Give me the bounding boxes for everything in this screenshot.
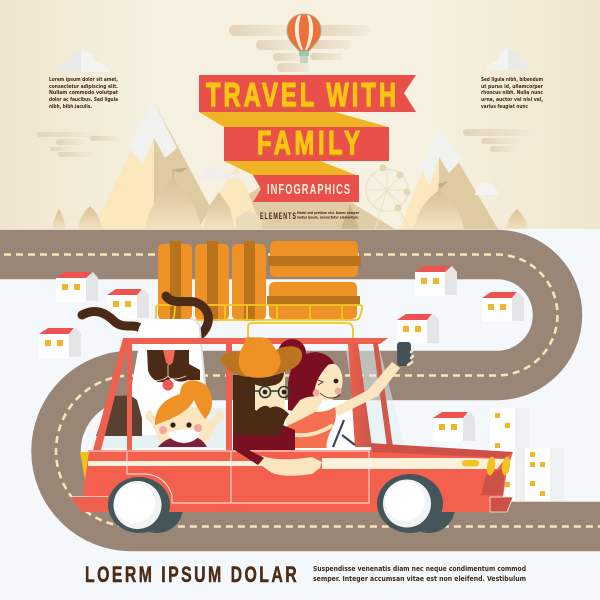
dog [82,296,210,436]
wheels [108,474,443,533]
woman [278,339,413,448]
city buildings [490,408,564,501]
banner: infographics [253,175,359,202]
footer text: Suspendisse venenatis diam nec neque condimentum commod [313,564,526,573]
elements caption: metus ipsum, consectetur elementum. [297,214,359,220]
front wheel [377,474,443,533]
text block: left: Lorem ipsum dolor sit amet, [49,77,118,83]
road [0,254,600,526]
text block: right: urna, auctor vel nisi vel, [481,97,543,103]
banner: family: FAMILY [257,125,360,162]
icon: phone [397,342,413,366]
background: sky [0,0,600,230]
banner ribbon folds [199,112,388,175]
luggage on roof rack [156,241,362,338]
elements caption: Morbi sed pretium nisi. Donec semper [297,210,359,215]
text block: right: rhoncus nibh. Nulla nunc [481,90,543,96]
grille and lights [481,468,505,495]
heading: loerm ipsum dolar: LOERM IPSUM DOLAR [85,564,297,588]
elements caption [260,210,359,221]
text block: right [481,77,543,110]
car windows [96,343,405,450]
banner: travel with: TRAVEL WITH [206,79,396,116]
arm [258,456,322,476]
text block: left: Nullam commodo volutpat [49,90,118,96]
rear wheel [108,477,170,533]
elements caption: ELEMENTS [260,211,296,221]
car body [70,443,513,512]
text block: left [49,77,118,110]
white stripe [88,458,505,469]
cloud stripes [37,25,541,157]
houses [39,266,524,442]
text block: right: Sed ligula nibh, bibendum [481,77,543,83]
rear tyres behind the car body [131,481,455,533]
footer text: semper. Integer accumsan vitae est non eleifend. Vestibulum [313,574,526,583]
banner: travel with: TRAVEL WITH [206,77,396,114]
mountains and landmarks [52,102,528,229]
text block: right: varius feugiat nunc [481,104,528,110]
car roof and pillars [93,338,393,450]
background: ground [0,229,600,600]
kid [145,380,224,447]
text block: left: dolor ac faucibus. Sed ligula [49,97,118,103]
banner: infographics: INFOGRAPHICS [267,181,350,198]
text block: left: consectetur adipiscing elit. [49,84,118,90]
text block: right: ut purus id, ullamcorper [481,84,543,90]
roof rack [156,305,362,338]
man with hat [220,337,302,450]
banner: family [224,125,389,164]
icon: hot air balloon [287,14,321,63]
clouds [56,49,531,195]
door lines [88,451,370,503]
footer text [313,564,526,583]
banner: family: FAMILY [257,127,360,164]
text block: left: nibh, bibh.iaculis. [49,104,92,110]
